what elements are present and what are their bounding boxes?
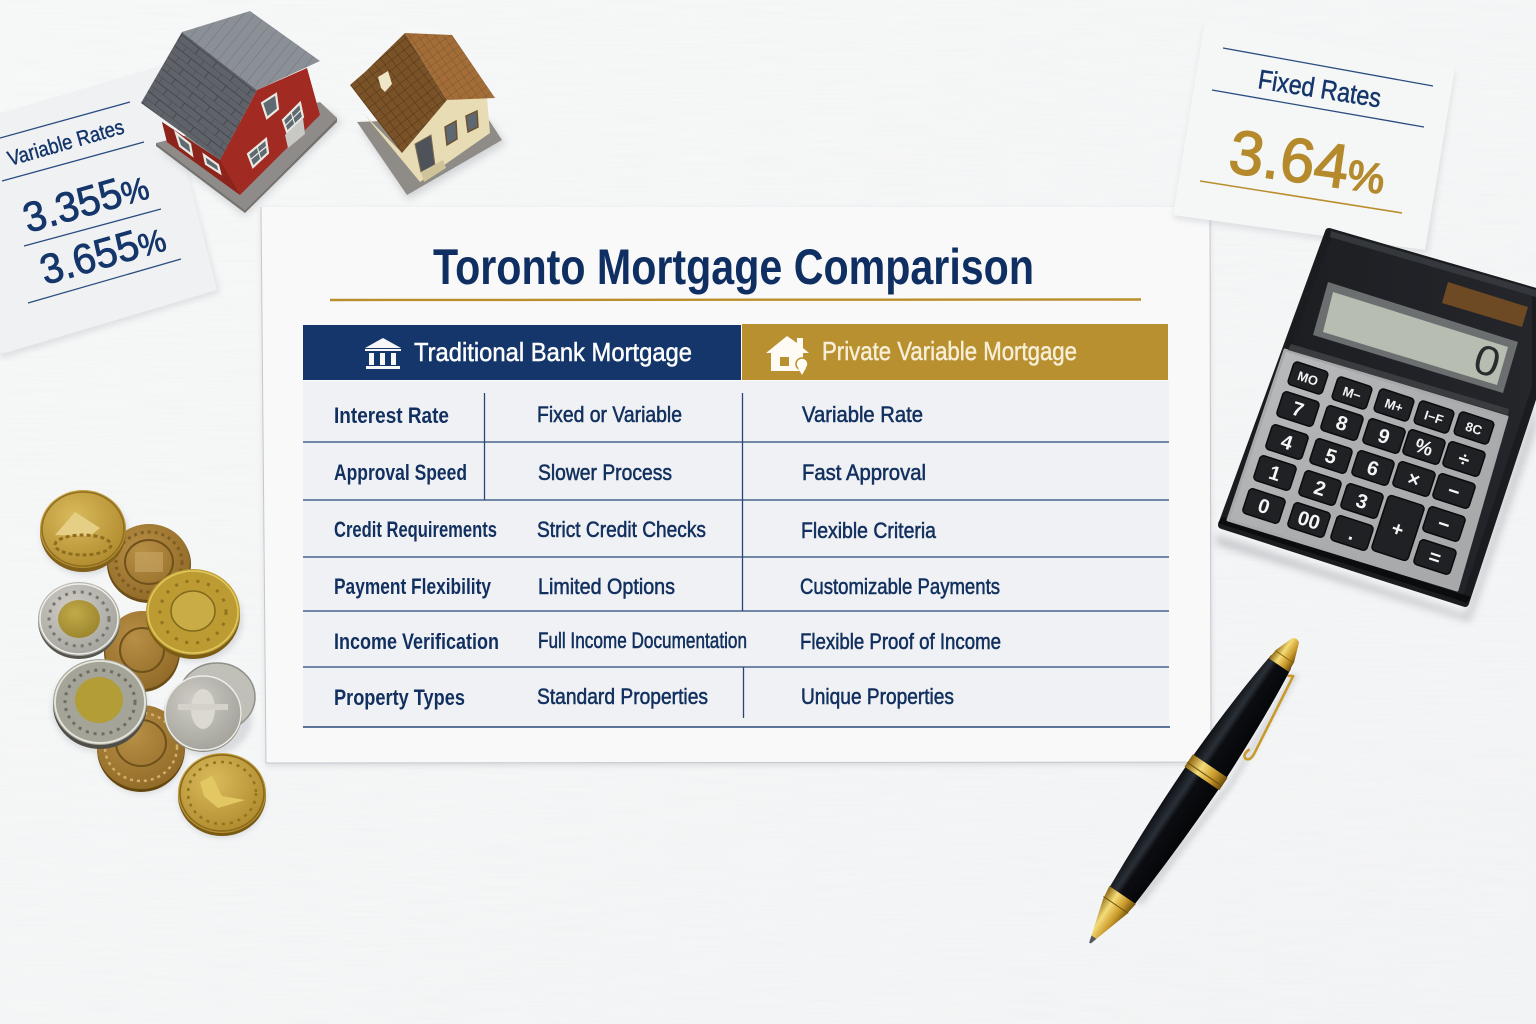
rate: 3.655%: 3.655% — [35, 213, 171, 294]
calculator keys: − — [1445, 480, 1463, 504]
roof — [141, 32, 257, 160]
calculator keys: 1 — [1266, 462, 1283, 486]
calculator face — [1228, 350, 1507, 590]
calculator keys: 4 — [1278, 431, 1296, 455]
row: income verification — [334, 628, 1001, 654]
row: approval speed: Approval Speed — [334, 460, 467, 485]
coin: gold top left — [40, 490, 126, 572]
row: property types: Unique Properties — [801, 684, 954, 709]
calculator keys: = — [1426, 546, 1444, 570]
header: private variable mortgage — [742, 324, 1168, 380]
row: credit requirements: Flexible Criteria — [801, 518, 937, 543]
row: payment flexibility: Limited Options — [538, 574, 675, 599]
coin: silver back — [179, 663, 255, 731]
pen tip cone — [1077, 886, 1136, 952]
coin: silver front — [164, 676, 242, 752]
title: Toronto Mortgage Comparison — [433, 239, 1034, 295]
pen top cap — [1269, 632, 1306, 672]
row: credit requirements: Credit Requirements — [334, 517, 497, 542]
row: payment flexibility: Payment Flexibility — [334, 574, 492, 599]
roof — [350, 33, 447, 153]
calculator keys: × — [1405, 468, 1423, 492]
calculator keys: 8C — [1464, 419, 1485, 438]
calculator keys: 9 — [1375, 425, 1392, 449]
row: income verification: Income Verification — [334, 629, 499, 654]
door and windows — [415, 135, 435, 172]
icon: cream model house — [350, 33, 506, 200]
calculator keys: + — [1388, 518, 1406, 542]
calculator keys: 6 — [1364, 457, 1381, 481]
heading: variable rates: Variable Rates — [5, 116, 127, 171]
calculator keys: 8 — [1333, 412, 1350, 436]
note rule lines — [0, 102, 181, 303]
display — [1313, 282, 1518, 393]
calculator keys: 7 — [1289, 398, 1306, 422]
calculator keys: . — [1346, 523, 1358, 545]
calculator keys: − — [1435, 513, 1453, 537]
calculator keys: ÷ — [1455, 448, 1472, 472]
panel: comparison sheet — [261, 207, 1212, 766]
row: credit requirements: Strict Credit Checks — [537, 517, 706, 542]
pen clip — [1236, 673, 1303, 761]
rate: 3.64%: 3.64% — [1225, 118, 1390, 208]
row: interest rate: Variable Rate — [802, 402, 923, 427]
coin: bimetal large — [53, 659, 147, 749]
icon: bank — [365, 338, 401, 369]
calculator keys: 2 — [1311, 477, 1328, 501]
row: approval speed: Slower Process — [538, 460, 672, 485]
panel: fixed rates note — [1173, 20, 1455, 254]
header label: private: Private Variable Mortgage — [822, 336, 1077, 366]
calculator keys: 5 — [1322, 445, 1339, 469]
calculator keys: I−F — [1422, 407, 1445, 428]
header label: traditional: Traditional Bank Mortgage — [414, 337, 692, 367]
coin: large gold — [146, 569, 240, 659]
icon: house with pin — [766, 336, 809, 375]
heading: fixed rates: Fixed Rates — [1256, 64, 1383, 113]
row: income verification: Flexible Proof of Income — [800, 629, 1001, 654]
icon: red model house — [141, 11, 342, 216]
coin: gold bottom right — [178, 753, 266, 836]
coin: bimetal left — [38, 582, 120, 659]
pen barrel — [1104, 651, 1298, 910]
row: income verification: Full Income Documentation — [538, 628, 747, 653]
coin: bronze top — [107, 524, 191, 603]
panel: variable rates note — [0, 66, 220, 358]
row: property types: Standard Properties — [537, 684, 708, 709]
icon: pen — [1073, 627, 1321, 960]
calculator keys: MO — [1296, 368, 1320, 389]
calculator keys: % — [1412, 435, 1436, 461]
calculator keys: 3 — [1353, 490, 1370, 514]
coin: bronze bottom — [97, 705, 185, 792]
pen centre ring — [1184, 754, 1228, 790]
display digit: 0 — [1468, 335, 1506, 387]
row: interest rate — [334, 402, 923, 428]
row: property types — [334, 684, 954, 710]
table body background — [303, 381, 1169, 727]
row: interest rate: Interest Rate — [334, 403, 449, 428]
windows — [176, 94, 303, 173]
row: interest rate: Fixed or Variable — [537, 402, 682, 427]
calculator keys: M+ — [1383, 395, 1405, 416]
row: payment flexibility: Customizable Payments — [800, 574, 1000, 599]
coin: bronze middle — [104, 611, 180, 692]
row: credit requirements — [334, 517, 937, 543]
header: traditional bank mortgage — [303, 325, 741, 380]
row: approval speed: Fast Approval — [802, 460, 926, 485]
calculator keys: 00 — [1295, 507, 1323, 535]
note rule lines — [1223, 48, 1433, 86]
calculator keys — [1242, 361, 1495, 575]
row: approval speed — [334, 460, 926, 485]
icon: coin pile — [38, 490, 266, 838]
calculator keys: M− — [1341, 383, 1363, 404]
calculator keys: 0 — [1255, 495, 1272, 519]
icon: calculator — [1216, 231, 1536, 622]
chimney — [378, 71, 392, 92]
rate: 3.355%: 3.355% — [18, 161, 154, 242]
row: property types: Property Types — [334, 685, 465, 710]
title underline — [330, 298, 1141, 301]
solar panel — [1442, 282, 1528, 327]
row: payment flexibility — [334, 574, 1000, 599]
